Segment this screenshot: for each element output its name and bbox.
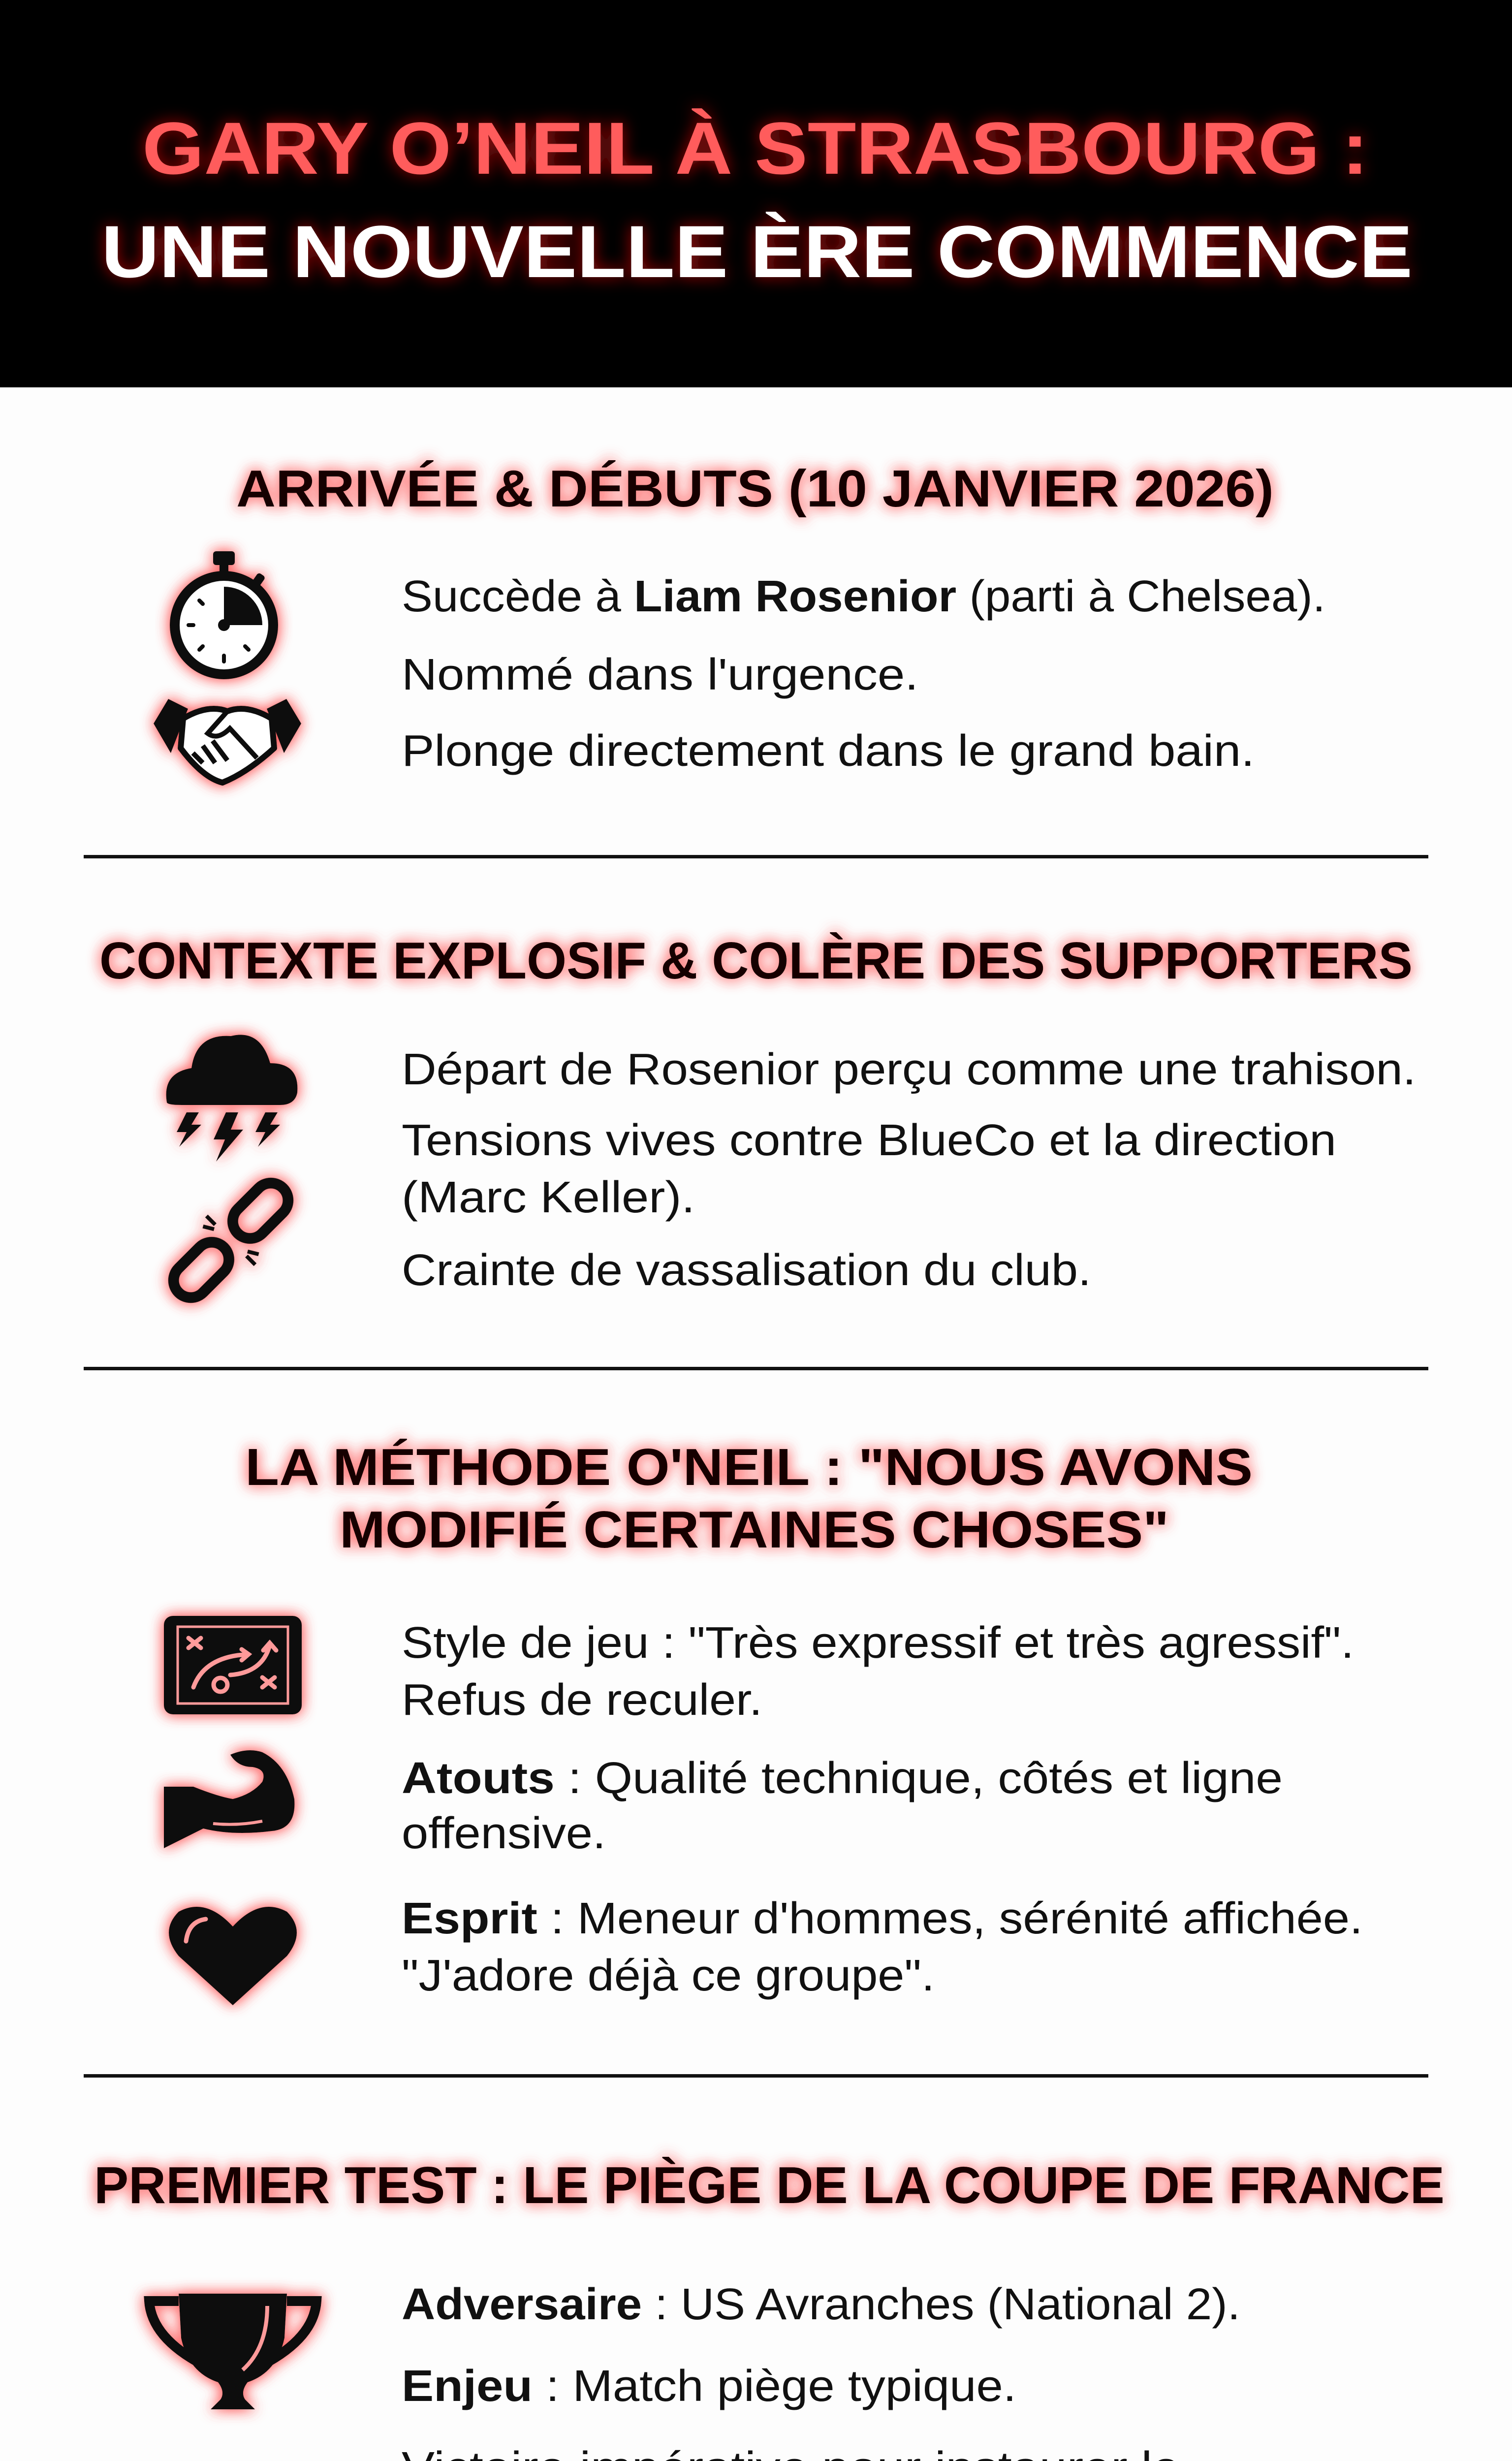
heading 3: LA MÉTHODE O'NEIL : "NOUS AVONS: [245, 1438, 1253, 1496]
text block 3: Esprit : Meneur d'hommes, sérénité affichée.: [402, 1894, 1363, 1943]
text block 1: Plonge directement dans le grand bain.: [402, 726, 1255, 776]
title line 2: UNE NOUVELLE ÈRE COMMENCE: [101, 210, 1413, 293]
icon: trophy: [149, 2294, 316, 2409]
panel: contexte explosif: [99, 932, 1416, 1317]
panel: arrivée & débuts: [154, 460, 1325, 783]
text block 2: (Marc Keller).: [402, 1173, 695, 1222]
icon: heart: [169, 1907, 297, 2005]
title line 1: GARY O’NEIL À STRASBOURG :: [142, 107, 1368, 189]
text block 4: [402, 2280, 1240, 2461]
icon: stopwatch: [175, 551, 273, 674]
panel: premier test: [94, 2156, 1445, 2461]
text block 1: [402, 572, 1325, 776]
text block 1: Nommé dans l'urgence.: [402, 650, 918, 699]
text block 3: "J'adore déjà ce groupe".: [402, 1951, 935, 2000]
text block 1: Succède à Liam Rosenior (parti à Chelsea).: [402, 572, 1325, 621]
heading 2: CONTEXTE EXPLOSIF & COLÈRE DES SUPPORTERS: [99, 932, 1413, 990]
icon: storm cloud: [166, 1035, 297, 1162]
text block 2: Départ de Rosenior perçu comme une trahison.: [402, 1045, 1416, 1094]
panel: méthode o'neil: [164, 1438, 1363, 2005]
icon: tactics board: [164, 1616, 302, 1714]
text block 3: Style de jeu : "Très expressif et très agressif".: [402, 1618, 1354, 1668]
heading 3: MODIFIÉ CERTAINES CHOSES": [340, 1501, 1169, 1559]
icon: broken chain: [154, 1164, 308, 1317]
text block 3: [402, 1618, 1363, 2000]
icon: bicep: [164, 1750, 294, 1848]
text block 4: Enjeu : Match piège typique.: [402, 2362, 1016, 2411]
heading 4: PREMIER TEST : LE PIÈGE DE LA COUPE DE FRANCE: [94, 2156, 1445, 2214]
text block 4: Adversaire : US Avranches (National 2).: [402, 2280, 1240, 2329]
text block 2: Tensions vives contre BlueCo et la direction: [402, 1116, 1336, 1165]
heading 3: [245, 1438, 1253, 1559]
heading 1: ARRIVÉE & DÉBUTS (10 JANVIER 2026): [236, 460, 1274, 518]
text block 3: Refus de reculer.: [402, 1675, 762, 1725]
icon: handshake: [154, 699, 301, 783]
text block 3: offensive.: [402, 1809, 606, 1858]
text block 2: [402, 1045, 1416, 1295]
text block 3: Atouts : Qualité technique, côtés et ligne: [402, 1754, 1283, 1803]
header band: [0, 0, 1512, 387]
text block 2: Crainte de vassalisation du club.: [402, 1246, 1091, 1295]
